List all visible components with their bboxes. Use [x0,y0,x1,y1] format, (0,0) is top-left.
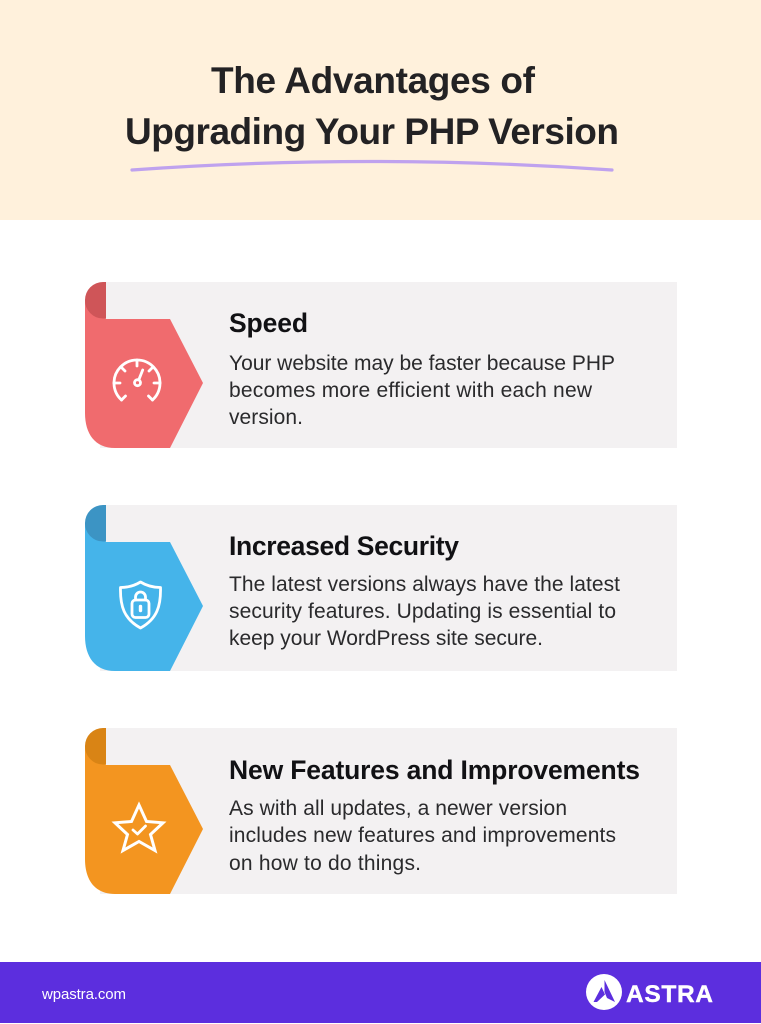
heading: security: Increased Security [229,531,459,561]
title: The Advantages of [211,60,536,101]
icon: shield with lock [120,582,161,628]
ribbon: security [85,523,203,671]
text: new features: includes new features and improvements [229,824,616,847]
header band [0,0,761,220]
ribbon: new features [85,746,203,894]
ribbon fold: new features [85,728,106,764]
ribbon fold: security [85,505,106,542]
text: new features: on how to do things. [229,852,421,875]
text: new features [229,797,616,875]
heading: speed: Speed [229,308,308,338]
panel: speed [85,282,677,448]
text: speed: Your website may be faster because PHP [229,352,615,375]
text: speed: version. [229,406,303,429]
icon: star with check [115,805,163,850]
site url: wpastra.com [41,986,126,1003]
text: security [229,573,620,650]
panel: security [85,505,677,671]
ribbon fold: speed [85,282,106,318]
text: security: keep your WordPress site secure. [229,627,543,650]
title underline [132,162,612,170]
heading: new features: New Features and Improvements [229,755,640,785]
logo: astra [586,974,713,1010]
title [125,60,619,152]
logo: astra: ASTRA [626,981,713,1008]
text: speed: becomes more efficient with each new [229,379,593,402]
title: Upgrading Your PHP Version [125,111,619,152]
icon: speedometer [114,360,160,400]
footer band [0,962,761,1023]
text: speed [229,352,615,429]
text: security: The latest versions always have the latest [229,573,620,596]
ribbon: speed [85,300,203,448]
panel: new features [85,728,677,894]
text: new features: As with all updates, a newer version [229,797,567,820]
text: security: security features. Updating is essential to [229,600,616,623]
